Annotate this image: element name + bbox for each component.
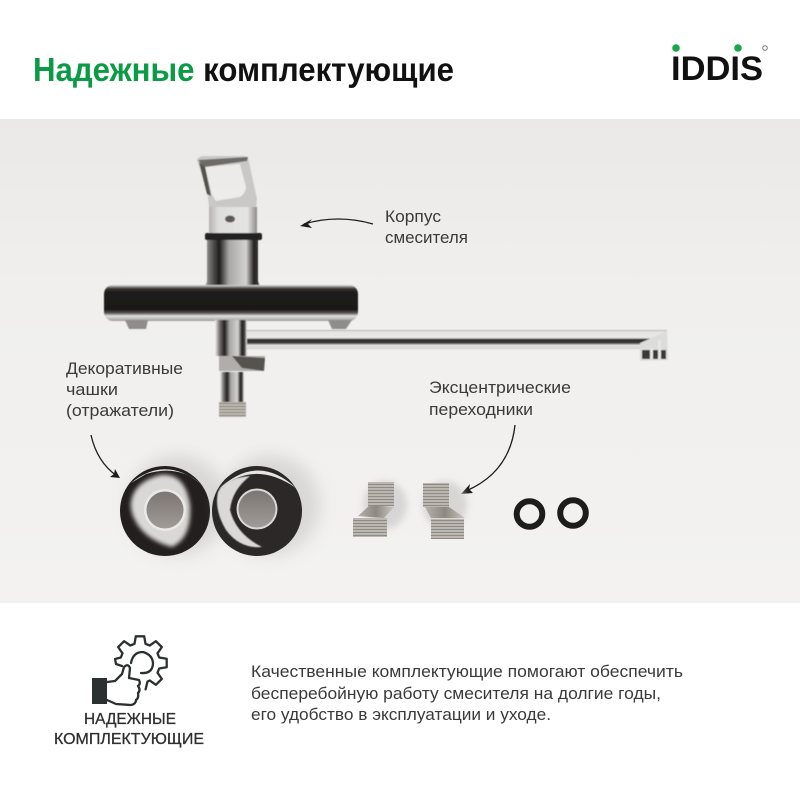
faucet lower column	[215, 320, 247, 356]
label: Корпус смесителя: Корпус	[385, 208, 441, 226]
faucet lower pipe	[220, 372, 244, 403]
photo: rubber ring 1	[517, 501, 542, 527]
faucet handle	[197, 156, 257, 208]
icon caption: НАДЕЖНЫЕ	[84, 711, 176, 728]
photo: faucet	[104, 156, 668, 417]
arrow: to adapters	[461, 425, 515, 494]
photo panel	[0, 119, 800, 603]
description text: его удобство в эксплуатации и уходе.	[251, 706, 551, 724]
photo: decorative cup 1	[120, 455, 228, 556]
arrow: to faucet body	[300, 219, 373, 228]
hand cuff	[92, 678, 107, 704]
thumb hand	[107, 665, 140, 705]
label: Декоративные чашки: чашки	[66, 381, 118, 399]
faucet left and right tabs	[125, 320, 352, 329]
faucet cap	[209, 207, 257, 233]
faucet ring	[205, 233, 262, 240]
gear inner arc	[131, 652, 153, 673]
faucet body column	[200, 240, 264, 288]
photo: rubber ring 2	[560, 500, 586, 526]
faucet diverter	[219, 356, 265, 371]
gear outline	[115, 636, 167, 689]
photo: adapter 2	[423, 481, 467, 539]
photo: decorative cup 2	[212, 455, 320, 556]
label: Эксцентрические переходники: Эксцентрические	[429, 379, 571, 397]
icon caption line 2: КОМПЛЕКТУЮЩИЕ	[54, 731, 204, 748]
photo: adapter 1	[353, 481, 407, 537]
title: Надежные комплектующие	[33, 51, 454, 88]
faucet bottom thread	[219, 402, 246, 417]
description text: Качественные комплектующие помогают обеспечить	[251, 663, 683, 681]
faucet spout	[247, 330, 668, 361]
label: Корпус смесителя: смесителя	[385, 229, 468, 247]
description text: бесперебойную работу смесителя на долгие годы,	[251, 685, 661, 703]
faucet plate	[104, 285, 358, 321]
label: Эксцентрические переходники: переходники	[429, 401, 533, 419]
arrow: to decorative cups	[91, 435, 120, 478]
logo: IDDIS: IDDIS	[671, 50, 763, 88]
label: Декоративные чашки: Декоративные	[66, 360, 183, 378]
label: Декоративные чашки: (отражатели)	[66, 402, 174, 420]
icon: thumbs up with gear	[92, 636, 167, 705]
